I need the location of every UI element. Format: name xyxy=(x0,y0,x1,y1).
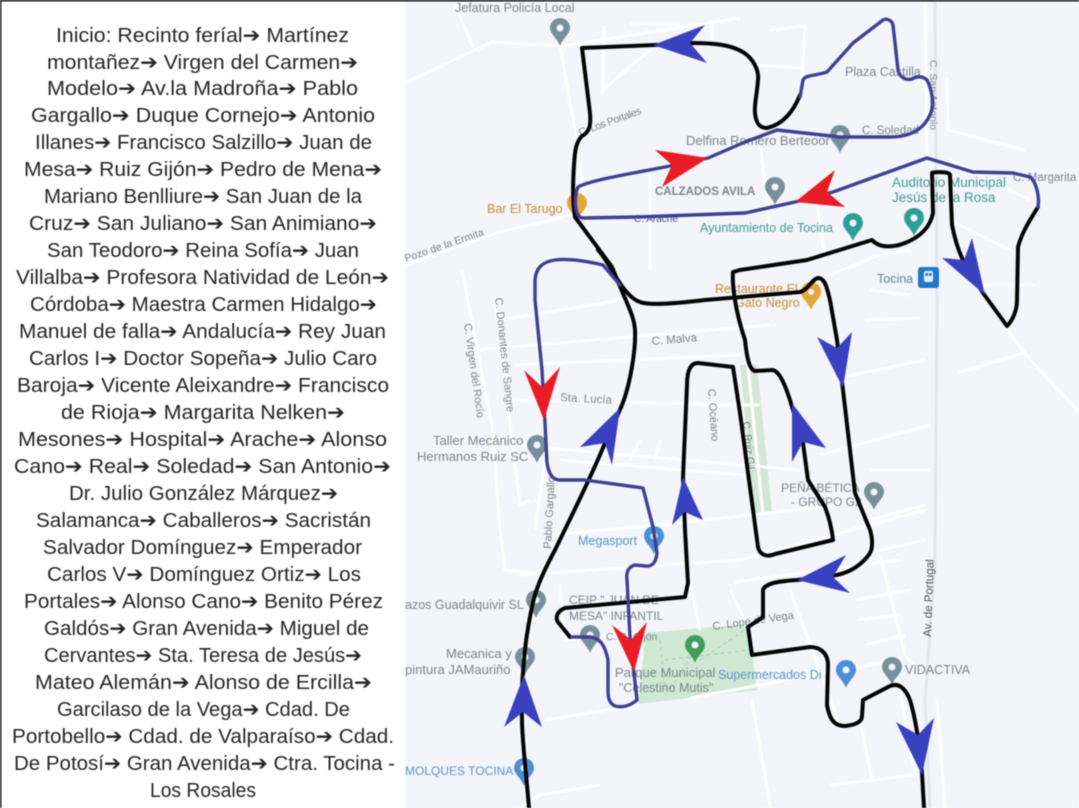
map: street and place labels: Pozo de la Ermita xyxy=(403,226,485,265)
map: street and place labels: C. R. Gijón xyxy=(606,631,658,643)
map: street and place labels: C. Margarita xyxy=(1013,172,1077,184)
route street list text: Villalba➔ Profesora Natividad de León➔ xyxy=(16,267,389,289)
route street list text: Dr. Julio González Márquez➔ xyxy=(69,483,338,505)
route street list text: Portales➔ Alonso Cano➔ Benito Pérez xyxy=(24,591,383,613)
route street list text: montañez➔ Virgen del Carmen➔ xyxy=(47,52,358,74)
route street list text: Modelo➔ Av.la Madroña➔ Pablo xyxy=(47,78,358,100)
panel: route map xyxy=(403,0,1079,808)
map: street and place labels: C. Océano xyxy=(705,388,721,442)
arrow: blue, right side xyxy=(942,238,985,295)
map: street and place labels: Parque Municipal xyxy=(615,665,716,680)
route: blue segments xyxy=(535,19,1038,707)
arrow: blue, centre down xyxy=(817,332,852,388)
route: black segments xyxy=(522,43,1038,808)
route street list text: Illanes➔ Francisco Salzillo➔ Juan de xyxy=(35,132,372,154)
map: street and place labels: Gato Negro xyxy=(735,296,800,310)
route street list text: Salvador Domínguez➔ Emperador xyxy=(43,537,362,559)
map: street and place labels: Megasport xyxy=(578,534,638,548)
map: street and place labels: MOLQUES TOCINA xyxy=(405,764,513,778)
map: street and place labels: C. Ruiz Gil xyxy=(740,421,756,470)
arrow: blue, up left xyxy=(580,408,620,465)
route street list text: Portobello➔ Cdad. de Valparaíso➔ Cdad. xyxy=(12,726,394,748)
map: street and place labels: Plaza Castilla xyxy=(845,65,921,79)
map: street and place labels: VIDACTIVA xyxy=(905,663,971,677)
map: street and place labels: Av. de Portugal xyxy=(922,559,937,637)
arrow: red, down park xyxy=(612,622,647,672)
arrow: blue, top xyxy=(653,25,707,63)
map: street and place labels: Supermercados Di xyxy=(718,668,822,682)
map: street and place labels: Hermanos Ruiz SC xyxy=(417,449,528,464)
map: street and place labels: Delfina Romero Berteoor xyxy=(686,133,830,148)
arrow: red, down left xyxy=(524,367,560,420)
map: street and place labels: CEIP " JUAN DE xyxy=(569,593,659,607)
arrow: blue, centre up xyxy=(792,403,826,462)
map: street and place labels: - GRUPO G2 xyxy=(791,495,862,509)
arrow: blue, bottom left xyxy=(504,675,542,727)
map: street and place labels: Ayuntamiento de Tocina xyxy=(700,221,833,235)
map: street and place labels: Mecanica y xyxy=(446,646,512,661)
map: street and place labels: C. Virgen del Rocío xyxy=(461,323,486,419)
route street list text: Gargallo➔ Duque Cornejo➔ Antonio xyxy=(31,105,375,127)
route street list text: Manuel de falla➔ Andalucía➔ Rey Juan xyxy=(19,321,386,343)
map: street and place labels: Sta. Lucía xyxy=(560,392,613,407)
map: street and place labels: C. Soledad xyxy=(862,125,919,137)
map: street and place labels: pintura JAMauriño xyxy=(405,662,510,677)
panel: street list xyxy=(0,0,405,808)
map: street and place labels: MESA" INFANTIL xyxy=(569,609,664,623)
map: street and place labels: C. Donantes de Sangre xyxy=(492,297,516,413)
route street list text: Mariano Benlliure➔ San Juan de la xyxy=(44,186,363,208)
route street list text: Carlos I➔ Doctor Sopeña➔ Julio Caro xyxy=(29,348,377,370)
map: street and place labels: C. Lope de Vega xyxy=(712,610,795,633)
route street list text: Mesones➔ Hospital➔ Arache➔ Alonso xyxy=(18,429,387,451)
map: street and place labels: Restaurante El xyxy=(715,282,798,296)
icon: pins xyxy=(514,18,924,786)
map: street and place labels: C. Los Portales xyxy=(577,105,643,139)
map: street and place labels: azos Guadalquivir SL xyxy=(405,598,524,612)
map: street and place labels: Pablo Gargallo xyxy=(542,476,558,549)
map: street and place labels: Jefatura Policía Local xyxy=(455,1,575,15)
route street list text: de Rioja➔ Margarita Nelken➔ xyxy=(61,402,345,424)
icon: train station xyxy=(918,267,939,288)
map: street and place labels: PEÑA BÉTICA xyxy=(781,480,860,495)
route street list text xyxy=(12,25,395,802)
route street list text: De Potosí➔ Gran Avenida➔ Ctra. Tocina - xyxy=(14,753,395,775)
map: street and place labels: Jesús de la Rosa xyxy=(892,190,996,205)
route street list text: Baroja➔ Vicente Aleixandre➔ Francisco xyxy=(17,375,389,397)
arrow: blue, left-pointing lower xyxy=(797,555,850,593)
map: street and place labels: CALZADOS AVILA xyxy=(655,186,755,198)
map: street and place labels: C. San Antonio xyxy=(927,60,939,130)
map: street and place labels xyxy=(403,1,1077,778)
arrow: blue, up centre xyxy=(672,477,703,525)
map: street and place labels: "Celestino Mutis" xyxy=(619,681,713,695)
arrow: red, left-pointing xyxy=(795,170,845,207)
map: street and place labels: Taller Mecánico xyxy=(433,433,523,448)
route street list text: Mateo Alemán➔ Alonso de Ercilla➔ xyxy=(35,672,372,694)
route street list text: Cruz➔ San Juliano➔ San Animiano➔ xyxy=(29,213,377,235)
route street list text: Cervantes➔ Sta. Teresa de Jesús➔ xyxy=(44,645,362,667)
route street list text: Salamanca➔ Caballeros➔ Sacristán xyxy=(36,510,371,532)
route street list text: Córdoba➔ Maestra Carmen Hidalgo➔ xyxy=(30,294,377,316)
map: parks xyxy=(638,365,772,704)
map: street and place labels: Auditorio Municipal xyxy=(892,175,1006,190)
route street list text: Galdós➔ Gran Avenida➔ Miguel de xyxy=(44,618,369,640)
route street list text: Carlos V➔ Domínguez Ortiz➔ Los xyxy=(47,564,361,586)
map: street network xyxy=(405,0,1079,808)
route street list text: Los Rosales xyxy=(150,780,256,802)
arrow: red, right-pointing xyxy=(655,150,708,187)
route street list text: San Teodoro➔ Reina Sofía➔ Juan xyxy=(47,240,359,262)
route street list text: Cano➔ Real➔ Soledad➔ San Antonio➔ xyxy=(14,456,391,478)
route street list text: Garcilaso de la Vega➔ Cdad. De xyxy=(57,699,350,721)
route street list text: Mesa➔ Ruiz Gijón➔ Pedro de Mena➔ xyxy=(24,159,382,181)
map: street and place labels: Bar El Tarugo xyxy=(487,202,563,216)
route street list text: Inicio: Recinto feríal➔ Martínez xyxy=(56,25,349,47)
map: street and place labels: C. Malva xyxy=(651,332,698,348)
arrow: blue, bottom right xyxy=(896,718,934,775)
map: street and place labels: Tocina xyxy=(877,272,913,286)
map: street and place labels: C. Arache xyxy=(634,214,678,225)
